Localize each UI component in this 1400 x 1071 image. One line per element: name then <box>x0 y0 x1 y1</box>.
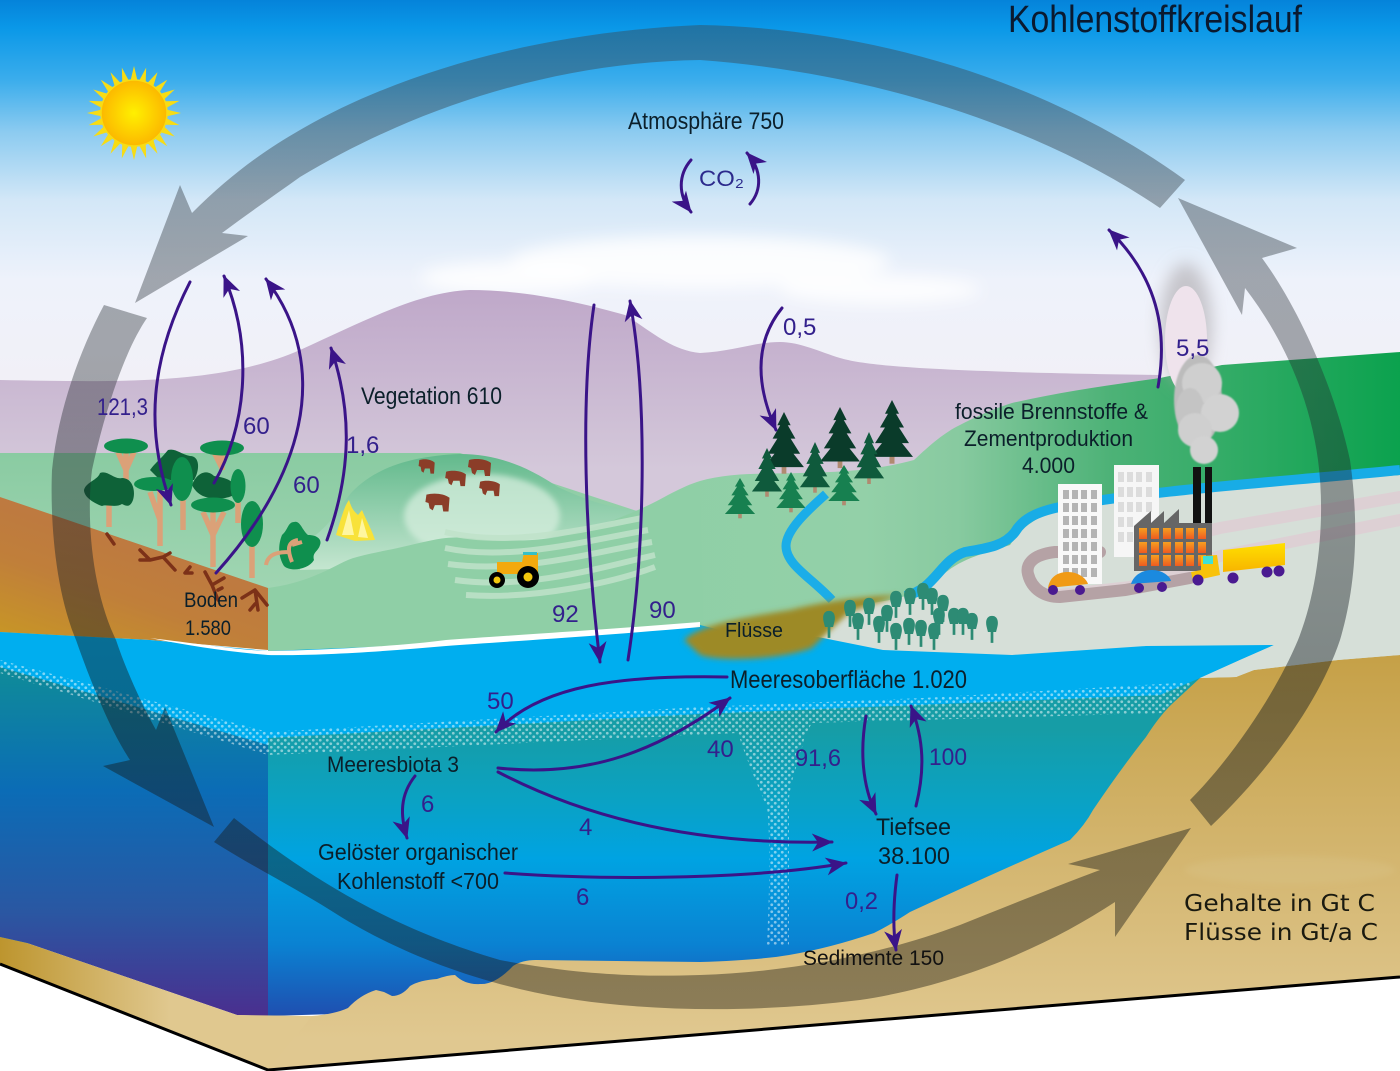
deep ocean front <box>268 678 1200 1016</box>
truck <box>1191 543 1285 586</box>
label: dissolved organic carbon: Kohlenstoff <700 <box>337 868 499 894</box>
roads <box>1028 497 1400 597</box>
flow fossil emissions <box>1109 230 1161 387</box>
sea floor sand right <box>268 655 1400 1071</box>
city buildings <box>1058 465 1159 584</box>
flows land-atmosphere <box>155 276 346 573</box>
back land left <box>0 453 700 640</box>
flow values: 100 <box>929 744 967 771</box>
soil <box>0 497 268 650</box>
label: atmosphere: Atmosphäre 750 <box>628 108 784 135</box>
label: deep sea: Tiefsee <box>876 814 951 841</box>
orange car <box>1048 572 1088 595</box>
forest of savanna trees <box>84 438 263 578</box>
fire <box>336 500 375 541</box>
deep ocean left face <box>0 667 268 1016</box>
sea floor sand left <box>0 937 312 1070</box>
base edge <box>0 964 1400 1070</box>
big arrow: right <box>1178 198 1355 826</box>
front field land <box>268 483 704 652</box>
label: ocean surface: Meeresoberfläche 1.020 <box>730 666 967 694</box>
title: Kohlenstoffkreislauf <box>1008 0 1302 41</box>
tractor <box>489 552 539 588</box>
label: fossil fuels: fossile Brennstoffe & <box>955 399 1148 424</box>
flow values: 60 <box>243 413 270 440</box>
roots <box>107 534 267 610</box>
sky background <box>0 0 1400 400</box>
flow values: 50 <box>487 688 514 715</box>
label: sediments: Sedimente 150 <box>803 947 944 970</box>
flow forest uptake <box>761 308 782 430</box>
small stream <box>786 494 832 600</box>
sun <box>87 66 181 160</box>
blue car <box>1131 570 1171 593</box>
shrub <box>266 522 320 569</box>
legend: units <box>1184 891 1378 946</box>
flow values: 6 <box>421 791 434 818</box>
flow values: 0,5 <box>783 314 816 341</box>
hill right <box>636 352 1400 650</box>
conifers <box>725 400 913 518</box>
big arrow: bottom <box>214 818 1191 1009</box>
flow values <box>97 314 1209 915</box>
faint sand highlight <box>1185 856 1395 884</box>
label: dissolved organic carbon: Gelöster organischer <box>318 839 518 865</box>
pasture highlight <box>404 474 560 558</box>
label: dissolved organic carbon <box>318 839 518 894</box>
ocean surface <box>0 625 1274 1000</box>
flow values: 6 <box>576 884 589 911</box>
label: fossil fuels: 4.000 <box>1022 453 1075 478</box>
flow values: 0,2 <box>845 888 878 915</box>
flow values: 60 <box>293 472 320 499</box>
river <box>905 470 1400 596</box>
clouds <box>420 236 980 304</box>
label: deep sea <box>876 814 951 870</box>
legend: units: Gehalte in Gt C <box>1184 891 1375 917</box>
label: fossil fuels: Zementproduktion <box>964 426 1133 451</box>
mountains <box>0 290 1160 560</box>
flow values: 121,3 <box>97 394 148 421</box>
label: marine biota: Meeresbiota 3 <box>327 752 459 777</box>
flows ocean-atmosphere <box>586 301 642 662</box>
flow values: 1,6 <box>346 432 379 459</box>
legend: units: Flüsse in Gt/a C <box>1184 920 1378 946</box>
hill with pasture <box>300 454 640 570</box>
dotted mixing layer <box>0 660 1195 945</box>
lowland mini trees <box>823 583 998 650</box>
big arrow: top <box>135 25 1185 303</box>
white shoreline <box>150 622 700 655</box>
cattle <box>419 459 500 511</box>
label: rivers: Flüsse <box>725 620 783 642</box>
flow values: 90 <box>649 597 676 624</box>
label: deep sea: 38.100 <box>878 843 950 870</box>
smoke plume <box>1160 263 1239 464</box>
flow values: 92 <box>552 601 579 628</box>
label: soil: Boden <box>184 589 238 612</box>
label: fossil fuels <box>955 399 1148 478</box>
flow values: 4 <box>579 814 592 841</box>
co2 exchange <box>681 153 759 212</box>
river delta <box>684 595 900 659</box>
label: soil: 1.580 <box>185 617 231 640</box>
flow values: 5,5 <box>1176 335 1209 362</box>
label: soil <box>184 589 238 640</box>
factory <box>1134 467 1212 571</box>
grey lowlands <box>810 475 1400 680</box>
ploughed field <box>445 518 655 596</box>
label: vegetation: Vegetation 610 <box>361 383 502 410</box>
flow values: 40 <box>707 736 734 763</box>
grey bank <box>1200 640 1400 678</box>
co2 exchange: CO₂ <box>699 166 744 191</box>
flow values: 91,6 <box>795 745 841 772</box>
flows in ocean <box>402 677 922 950</box>
big arrow: left <box>52 305 214 827</box>
